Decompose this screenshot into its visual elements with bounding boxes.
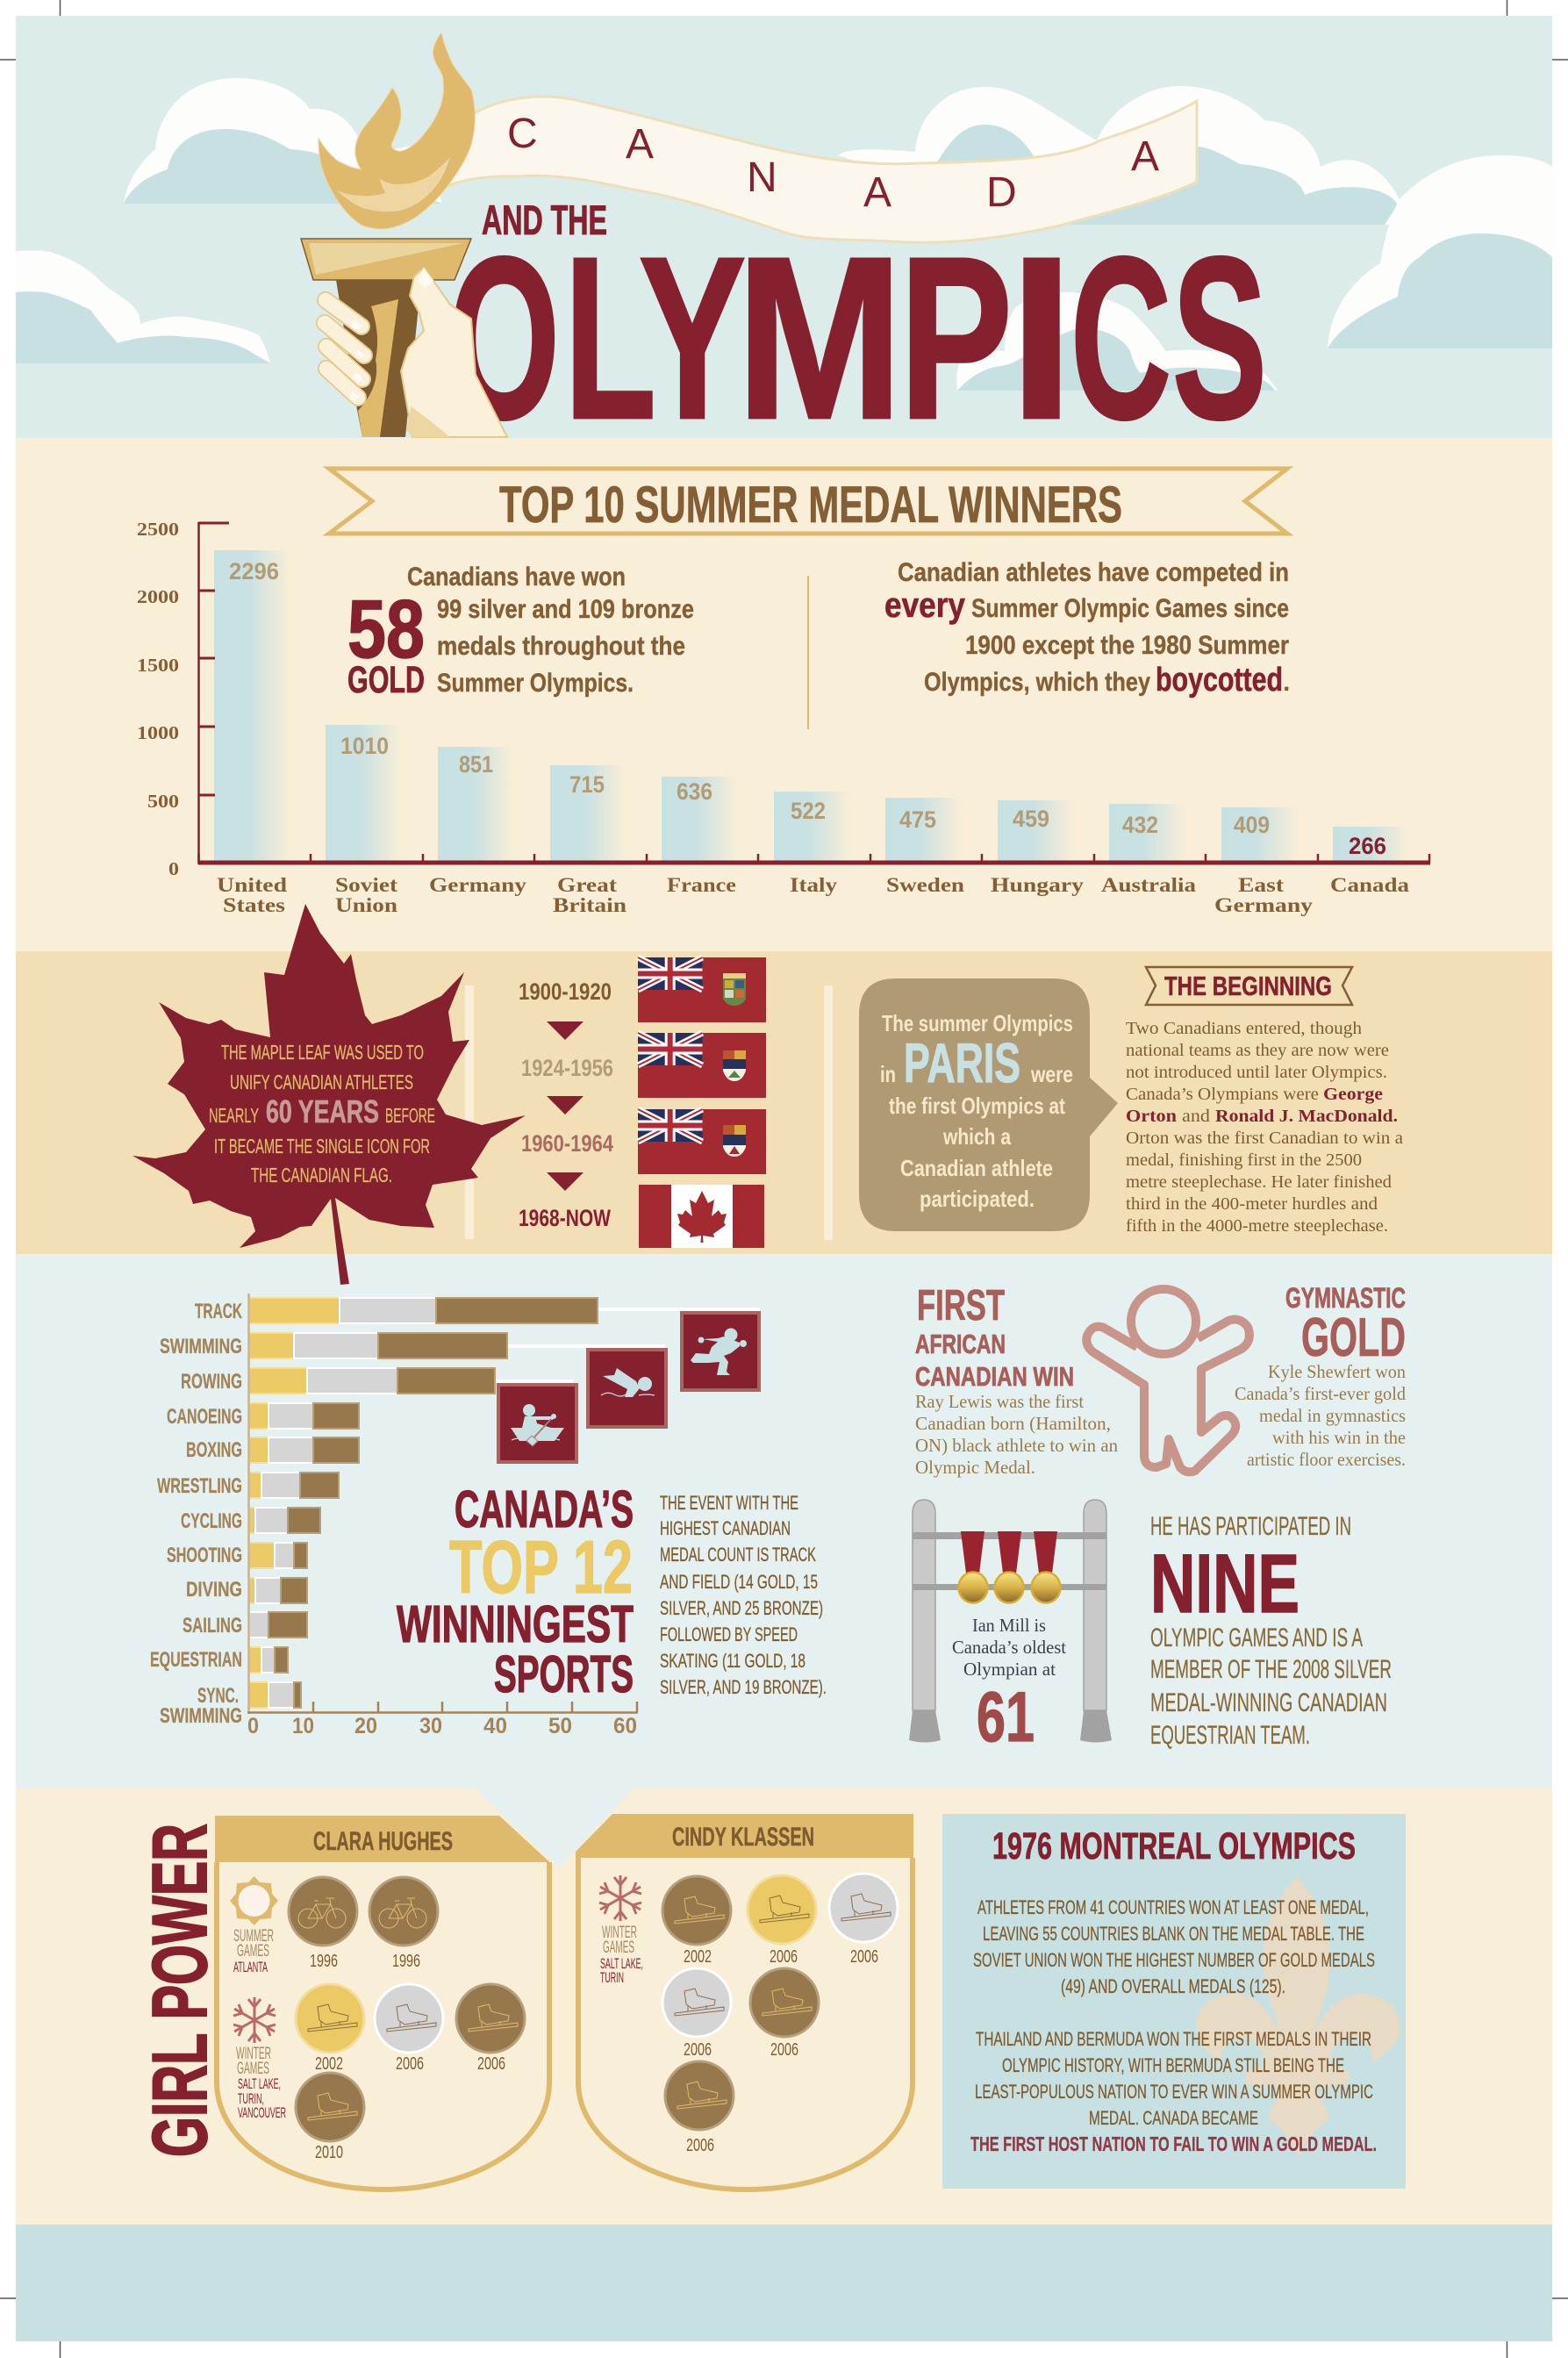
medals: clara: 1996 [392, 1952, 420, 1971]
callout: paris speech bubble: The summer Olympics [882, 1010, 1073, 1036]
banner ribbon with CANADA: C [507, 111, 538, 157]
text block: nine olympic games: NINE [1150, 1537, 1300, 1631]
callout: paris speech bubble: PARIS [904, 1033, 1020, 1094]
text block: nine olympic games: MEMBER OF THE 2008 SILVER [1150, 1655, 1392, 1684]
bar chart: Union [335, 894, 397, 917]
icon: maple leaf with text: UNIFY CANADIAN ATHLETES [230, 1071, 413, 1093]
medals: cindy [662, 1874, 898, 2155]
stacked bar chart: SHOOTING [167, 1544, 242, 1567]
text block: highest medal count: SILVER, AND 19 BRONZE). [660, 1676, 827, 1698]
summer games label [233, 1927, 274, 1975]
text block: the beginning: Two Canadians entered, though [1126, 1019, 1362, 1038]
medals: cindy: 2006 [686, 2136, 714, 2155]
text block: highest medal count: FOLLOWED BY SPEED [660, 1623, 798, 1645]
bar chart: States [223, 894, 285, 917]
panel: canada's top 12 sports [150, 1282, 1406, 1757]
shield: clara hughes: CLARA HUGHES [313, 1827, 453, 1856]
text block: first african canadian win [915, 1282, 1118, 1478]
icon: maple leaf with text: THE CANADIAN FLAG. [251, 1164, 392, 1186]
stacked bar chart: 60 [613, 1714, 637, 1738]
olympics wordmark: L [564, 209, 656, 467]
text block: montreal: ATHLETES FROM 41 COUNTRIES WON AT LEAST ONE MEDAL, [977, 1896, 1369, 1918]
icon: snowflake [599, 1875, 641, 1921]
icon: medals on rack [909, 1500, 1112, 1743]
callout: paris speech bubble: participated. [920, 1186, 1035, 1212]
icon: maple leaf with text: NEARLY [209, 1104, 259, 1127]
icon: torch cup [301, 239, 471, 280]
icon: runner pictogram [682, 1313, 759, 1390]
text block: nine olympic games [1150, 1512, 1392, 1750]
callout: competed in every games: . [1283, 668, 1290, 697]
callout: competed in every games: Olympics, which they [924, 668, 1150, 697]
date labels: 1900-1920 [519, 978, 612, 1005]
stacked bar chart: 0 [247, 1714, 259, 1738]
and the: AND THE [482, 197, 607, 243]
callout: 58 gold medals: Summer Olympics. [437, 669, 634, 698]
banner ribbon with CANADA [445, 97, 1197, 242]
bar chart: 715 [569, 771, 605, 798]
text block: gymnastic gold: Kyle Shewfert won [1268, 1361, 1406, 1382]
bar chart: Australia [1101, 874, 1196, 897]
medals: clara: 2010 [315, 2143, 343, 2162]
text block: montreal: OLYMPIC HISTORY, WITH BERMUDA STILL BEING THE [1002, 2054, 1344, 2076]
icon: maple leaf with text: THE MAPLE LEAF WAS USED TO [221, 1041, 424, 1064]
summer games label: ATLANTA [233, 1959, 268, 1975]
stacked bar chart [150, 1294, 760, 1738]
panel: 1976 montreal olympics [942, 1814, 1406, 2189]
heading: canada's top 12 winningest sports: WINNINGEST [397, 1595, 634, 1653]
icon: rower pictogram [498, 1385, 576, 1462]
olympics wordmark [448, 209, 1267, 467]
text block: highest medal count: SILVER, AND 25 BRONZE) [660, 1597, 823, 1619]
text block: ian mill: Olympian at [963, 1659, 1056, 1680]
text block: montreal: LEAVING 55 COUNTRIES BLANK ON THE MEDAL TABLE. THE [983, 1923, 1364, 1945]
text block: first african canadian win: AFRICAN [915, 1329, 1006, 1359]
heading: the beginning: THE BEGINNING [1164, 971, 1332, 1001]
text block: gymnastic gold: artistic floor exercises. [1247, 1449, 1406, 1470]
icon: gymnast outline [1086, 1289, 1249, 1472]
text block: highest medal count: HIGHEST CANADIAN [660, 1517, 791, 1539]
winter games label: VANCOUVER [238, 2104, 286, 2121]
bar chart: 1010 [340, 733, 389, 759]
text block: the beginning: Ronald J. MacDonald. [1215, 1107, 1398, 1126]
icon: fleur-de-lis [1196, 1876, 1400, 2156]
winter games label: TURIN, [238, 2090, 264, 2107]
banner ribbon with CANADA: A [626, 121, 654, 168]
winter games label: SALT LAKE, [600, 1955, 643, 1972]
text block: gymnastic gold: GYMNASTIC [1285, 1282, 1406, 1314]
bar chart: 636 [677, 778, 712, 805]
flag: red ensign 1924 [638, 1033, 766, 1098]
bar chart: Britain [553, 894, 626, 917]
text block: montreal: THE FIRST HOST NATION TO FAIL TO WIN A GOLD MEDAL. [970, 2132, 1377, 2155]
text block: montreal: LEAST-POPULOUS NATION TO EVER WIN A SUMMER OLYMPIC [975, 2081, 1373, 2103]
medals: clara [289, 1877, 525, 2162]
stacked bar chart: EQUESTRIAN [150, 1648, 242, 1672]
olympics wordmark: O [448, 209, 560, 467]
medals: cindy: 2006 [770, 1947, 798, 1967]
callout: 58 gold medals: 99 silver and 109 bronze [437, 595, 694, 624]
section backgrounds [16, 438, 1552, 2341]
heading: canada's top 12 winningest sports: CANADA’S [455, 1480, 634, 1538]
text block: the beginning: third in the 400-meter hurdles and [1126, 1194, 1378, 1214]
text block: ian mill: Canada’s oldest [952, 1637, 1066, 1658]
text block: gymnastic gold: Canada’s first-ever gold [1235, 1383, 1406, 1404]
bar chart: Italy [790, 874, 837, 897]
medals: cindy: 2006 [770, 2040, 798, 2060]
text block: montreal [970, 1896, 1377, 2155]
callout: 58 gold medals: medals throughout the [437, 632, 685, 661]
text block: the beginning: and [1182, 1107, 1210, 1126]
shield: cindy klassen [576, 1814, 913, 2190]
olympics wordmark: S [1172, 209, 1267, 467]
text block: ian mill [952, 1615, 1066, 1757]
heading ribbon [329, 469, 1287, 534]
text block: the beginning: not introduced until later Olympics. [1126, 1063, 1387, 1082]
text block: highest medal count: SKATING (11 GOLD, 18 [660, 1650, 805, 1672]
bar chart: Great [557, 874, 617, 897]
text block: the beginning: fifth in the 4000-metre steeplechase. [1126, 1216, 1388, 1236]
heading: canada's top 12 winningest sports [397, 1480, 634, 1703]
text block: gymnastic gold: medal in gymnastics [1259, 1405, 1406, 1426]
stacked bar chart: SAILING [183, 1614, 242, 1638]
medals: cindy: 2006 [684, 2040, 712, 2060]
heading: montreal: 1976 MONTREAL OLYMPICS [992, 1825, 1356, 1867]
medals: clara: 1996 [310, 1952, 338, 1971]
cloud: top left [124, 78, 442, 204]
icon: snowflake [233, 1997, 276, 2043]
text block: ian mill: 61 [977, 1678, 1035, 1757]
text block: nine olympic games: EQUESTRIAN TEAM. [1150, 1721, 1310, 1750]
bar chart: Canada [1330, 874, 1409, 897]
text block: first african canadian win: CANADIAN WIN [915, 1361, 1074, 1392]
text block: montreal: SOVIET UNION WON THE HIGHEST NUMBER OF GOLD MEDALS [973, 1949, 1375, 1971]
title block [301, 32, 1267, 467]
callout: 58 gold medals [347, 563, 694, 701]
text block: the beginning: George [1323, 1085, 1383, 1104]
stacked bar chart: ROWING [181, 1370, 242, 1394]
winter games label: WINTER [602, 1924, 637, 1942]
text block: nine olympic games: MEDAL-WINNING CANADIAN [1150, 1688, 1387, 1717]
bar chart: Soviet [335, 874, 397, 897]
winter games label [236, 2045, 286, 2121]
olympics wordmark: I [1009, 209, 1074, 467]
icon: swimmer pictogram [588, 1350, 666, 1427]
olympics wordmark: Y [639, 209, 746, 467]
bar chart: 459 [1013, 806, 1049, 832]
bar chart: France [667, 874, 736, 897]
cloud: middle lower [956, 292, 1278, 391]
olympics wordmark: C [1070, 209, 1171, 467]
heading: girl power: GIRL POWER [136, 1824, 223, 2157]
bar chart: Hungary [991, 874, 1084, 897]
summer games label: GAMES [237, 1942, 269, 1960]
banner ribbon with CANADA: A [1131, 133, 1159, 180]
icon: torch handle [336, 280, 421, 437]
winter games label [600, 1924, 643, 1986]
bar chart: 2500 [137, 519, 179, 540]
text block: highest medal count: MEDAL COUNT IS TRACK [660, 1544, 816, 1566]
text block: highest medal count [660, 1492, 827, 1698]
summer games label: SUMMER [233, 1927, 274, 1946]
banner ribbon with CANADA: N [747, 154, 777, 201]
winter games label: GAMES [603, 1939, 634, 1957]
bar chart: Germany [1214, 894, 1313, 917]
text block: gymnastic gold: GOLD [1301, 1308, 1406, 1368]
callout: 58 gold medals: Canadians have won [407, 563, 626, 591]
bar chart: 851 [459, 751, 493, 778]
bar chart: 2000 [137, 586, 179, 607]
medals: cindy: 2006 [850, 1947, 878, 1967]
banner ribbon with CANADA: A [863, 169, 891, 216]
stacked bar chart: BOXING [186, 1438, 242, 1462]
flag timeline [519, 957, 766, 1248]
text block: the beginning: Canada’s Olympians were [1126, 1085, 1319, 1104]
medals: clara: 2006 [477, 2054, 505, 2074]
bar chart: 266 [1349, 833, 1386, 859]
text block: highest medal count: AND FIELD (14 GOLD, 15 [660, 1571, 818, 1593]
panel: girl power [136, 1814, 1406, 2190]
text block: the beginning: national teams as they are now were [1126, 1041, 1389, 1060]
cloud: top right [838, 86, 1400, 225]
callout: competed in every games: Canadian athletes have competed in [898, 558, 1289, 587]
text block: the beginning: metre steeplechase. He later finished [1126, 1172, 1392, 1192]
callout: paris speech bubble [859, 978, 1118, 1231]
icon: maple leaf with text: IT BECAME THE SINGLE ICON FOR [214, 1135, 430, 1157]
winter games label: GAMES [237, 2060, 269, 2078]
stacked bar chart: 50 [548, 1714, 572, 1738]
bar chart: 432 [1122, 812, 1158, 838]
callout: paris speech bubble: were [1030, 1061, 1073, 1087]
stacked bar chart: SWIMMING [160, 1704, 242, 1728]
callout: paris speech bubble: Canadian athlete [900, 1155, 1053, 1181]
bar chart: 0 [168, 858, 179, 879]
callout: competed in every games: Summer Olympic Games since [971, 594, 1289, 623]
callout: 58 gold medals: 58 [347, 583, 425, 675]
text block: the beginning: Orton [1126, 1107, 1177, 1126]
callout: paris speech bubble: which a [942, 1123, 1011, 1150]
flag: canada [639, 1185, 764, 1248]
stacked bar chart: DIVING [186, 1578, 242, 1602]
olympics wordmark: P [899, 209, 1013, 467]
text block: montreal: MEDAL. CANADA BECAME [1089, 2107, 1258, 2129]
text block: first african canadian win: Canadian born (Hamilton, [915, 1413, 1111, 1434]
bar chart: 1000 [137, 722, 179, 743]
bar chart: 2296 [229, 558, 279, 584]
arrows [547, 1021, 584, 1191]
olympics wordmark: M [736, 209, 903, 467]
heading ribbon: TOP 10 SUMMER MEDAL WINNERS [499, 477, 1122, 534]
stacked bar chart: 30 [419, 1714, 442, 1738]
bar chart: 475 [899, 806, 936, 833]
header sky panel [16, 16, 1552, 439]
text block: first african canadian win: ON) black athlete to win an [915, 1435, 1118, 1456]
text block: the beginning [1126, 1019, 1403, 1236]
medals: clara: 2002 [315, 2054, 343, 2074]
banner ribbon with CANADA: D [986, 169, 1017, 216]
stacked bar chart: CYCLING [181, 1509, 242, 1533]
stacked bar chart: CANOEING [167, 1405, 242, 1429]
text block: montreal: (49) AND OVERALL MEDALS (125). [1061, 1975, 1285, 1997]
icon: sun [230, 1876, 278, 1925]
text block: the beginning: Orton was the first Canadian to win a [1126, 1129, 1403, 1148]
callout: competed in every games: boycotted [1156, 662, 1283, 699]
bar chart: Sweden [886, 874, 964, 897]
winter games label: TURIN [600, 1969, 624, 1986]
flag: red ensign 1960 [638, 1109, 766, 1174]
stacked bar chart: SYNC. [197, 1684, 239, 1708]
text block: gymnastic gold: with his win in the [1272, 1427, 1406, 1448]
date labels: 1960-1964 [521, 1130, 613, 1157]
cloud: left lower [16, 250, 270, 363]
icon: maple leaf with text: BEFORE [385, 1104, 435, 1127]
callout: competed in every games: 1900 except the 1980 Summer [965, 631, 1289, 660]
stacked bar chart: TRACK [195, 1300, 242, 1323]
date labels: 1968-NOW [519, 1205, 611, 1231]
callout: competed in every games: every [884, 586, 966, 625]
icon: torch flame [319, 32, 475, 229]
callout: paris speech bubble: the first Olympics at [889, 1093, 1065, 1119]
text block: highest medal count: THE EVENT WITH THE [660, 1492, 798, 1514]
date labels [519, 978, 613, 1231]
bar chart: United [217, 874, 287, 897]
text block: nine olympic games: HE HAS PARTICIPATED IN [1150, 1512, 1351, 1541]
bar chart: 500 [147, 791, 179, 812]
icon: maple leaf with text: 60 YEARS [266, 1093, 379, 1129]
text block: first african canadian win: Ray Lewis was the first [915, 1391, 1084, 1412]
stacked bar chart: SWIMMING [160, 1335, 242, 1358]
bar chart: Germany [429, 874, 526, 897]
heading: canada's top 12 winningest sports: SPORTS [494, 1645, 634, 1703]
winter games label: WINTER [236, 2045, 271, 2063]
icon: maple leaf with text [132, 904, 526, 1285]
bar chart: East [1238, 874, 1284, 897]
heading: the beginning [1146, 967, 1352, 1005]
bar chart [137, 519, 1430, 917]
icon: hand [325, 268, 507, 437]
text block: the beginning: medal, finishing first in the 2500 [1126, 1150, 1362, 1170]
text block: gymnastic gold [1235, 1282, 1406, 1470]
panel: flags and the beginning [132, 904, 1403, 1285]
callout: 58 gold medals: GOLD [347, 659, 425, 701]
text block: montreal: THAILAND AND BERMUDA WON THE FIRST MEDALS IN THEIR [976, 2028, 1371, 2050]
heading: canada's top 12 winningest sports: TOP 12 [449, 1526, 633, 1609]
text block: nine olympic games: OLYMPIC GAMES AND IS A [1150, 1623, 1363, 1652]
medals: cindy: 2002 [684, 1947, 712, 1967]
cloud: far right [1328, 155, 1552, 348]
bar chart: 522 [791, 798, 826, 824]
stacked bar chart: WRESTLING [157, 1474, 242, 1498]
text block: first african canadian win: Olympic Medal. [915, 1457, 1035, 1478]
shield: cindy klassen: CINDY KLASSEN [672, 1823, 814, 1852]
callout: paris speech bubble: in [880, 1061, 896, 1087]
shield: clara hughes [215, 1816, 549, 2190]
flag: red ensign 1900 [638, 957, 766, 1022]
bar chart: 1500 [137, 655, 179, 676]
panel: top 10 summer medal winners [137, 469, 1430, 917]
stacked bar chart: 20 [354, 1714, 377, 1738]
stacked bar chart: 10 [292, 1714, 314, 1738]
bar chart: 409 [1234, 812, 1270, 838]
medals: clara: 2006 [396, 2054, 424, 2074]
text block: first african canadian win: FIRST [917, 1282, 1005, 1330]
date labels: 1924-1956 [521, 1055, 613, 1081]
text block: ian mill: Ian Mill is [972, 1615, 1046, 1636]
callout: competed in every games [884, 558, 1290, 699]
winter games label: SALT LAKE, [238, 2075, 281, 2092]
stacked bar chart: 40 [483, 1714, 507, 1738]
